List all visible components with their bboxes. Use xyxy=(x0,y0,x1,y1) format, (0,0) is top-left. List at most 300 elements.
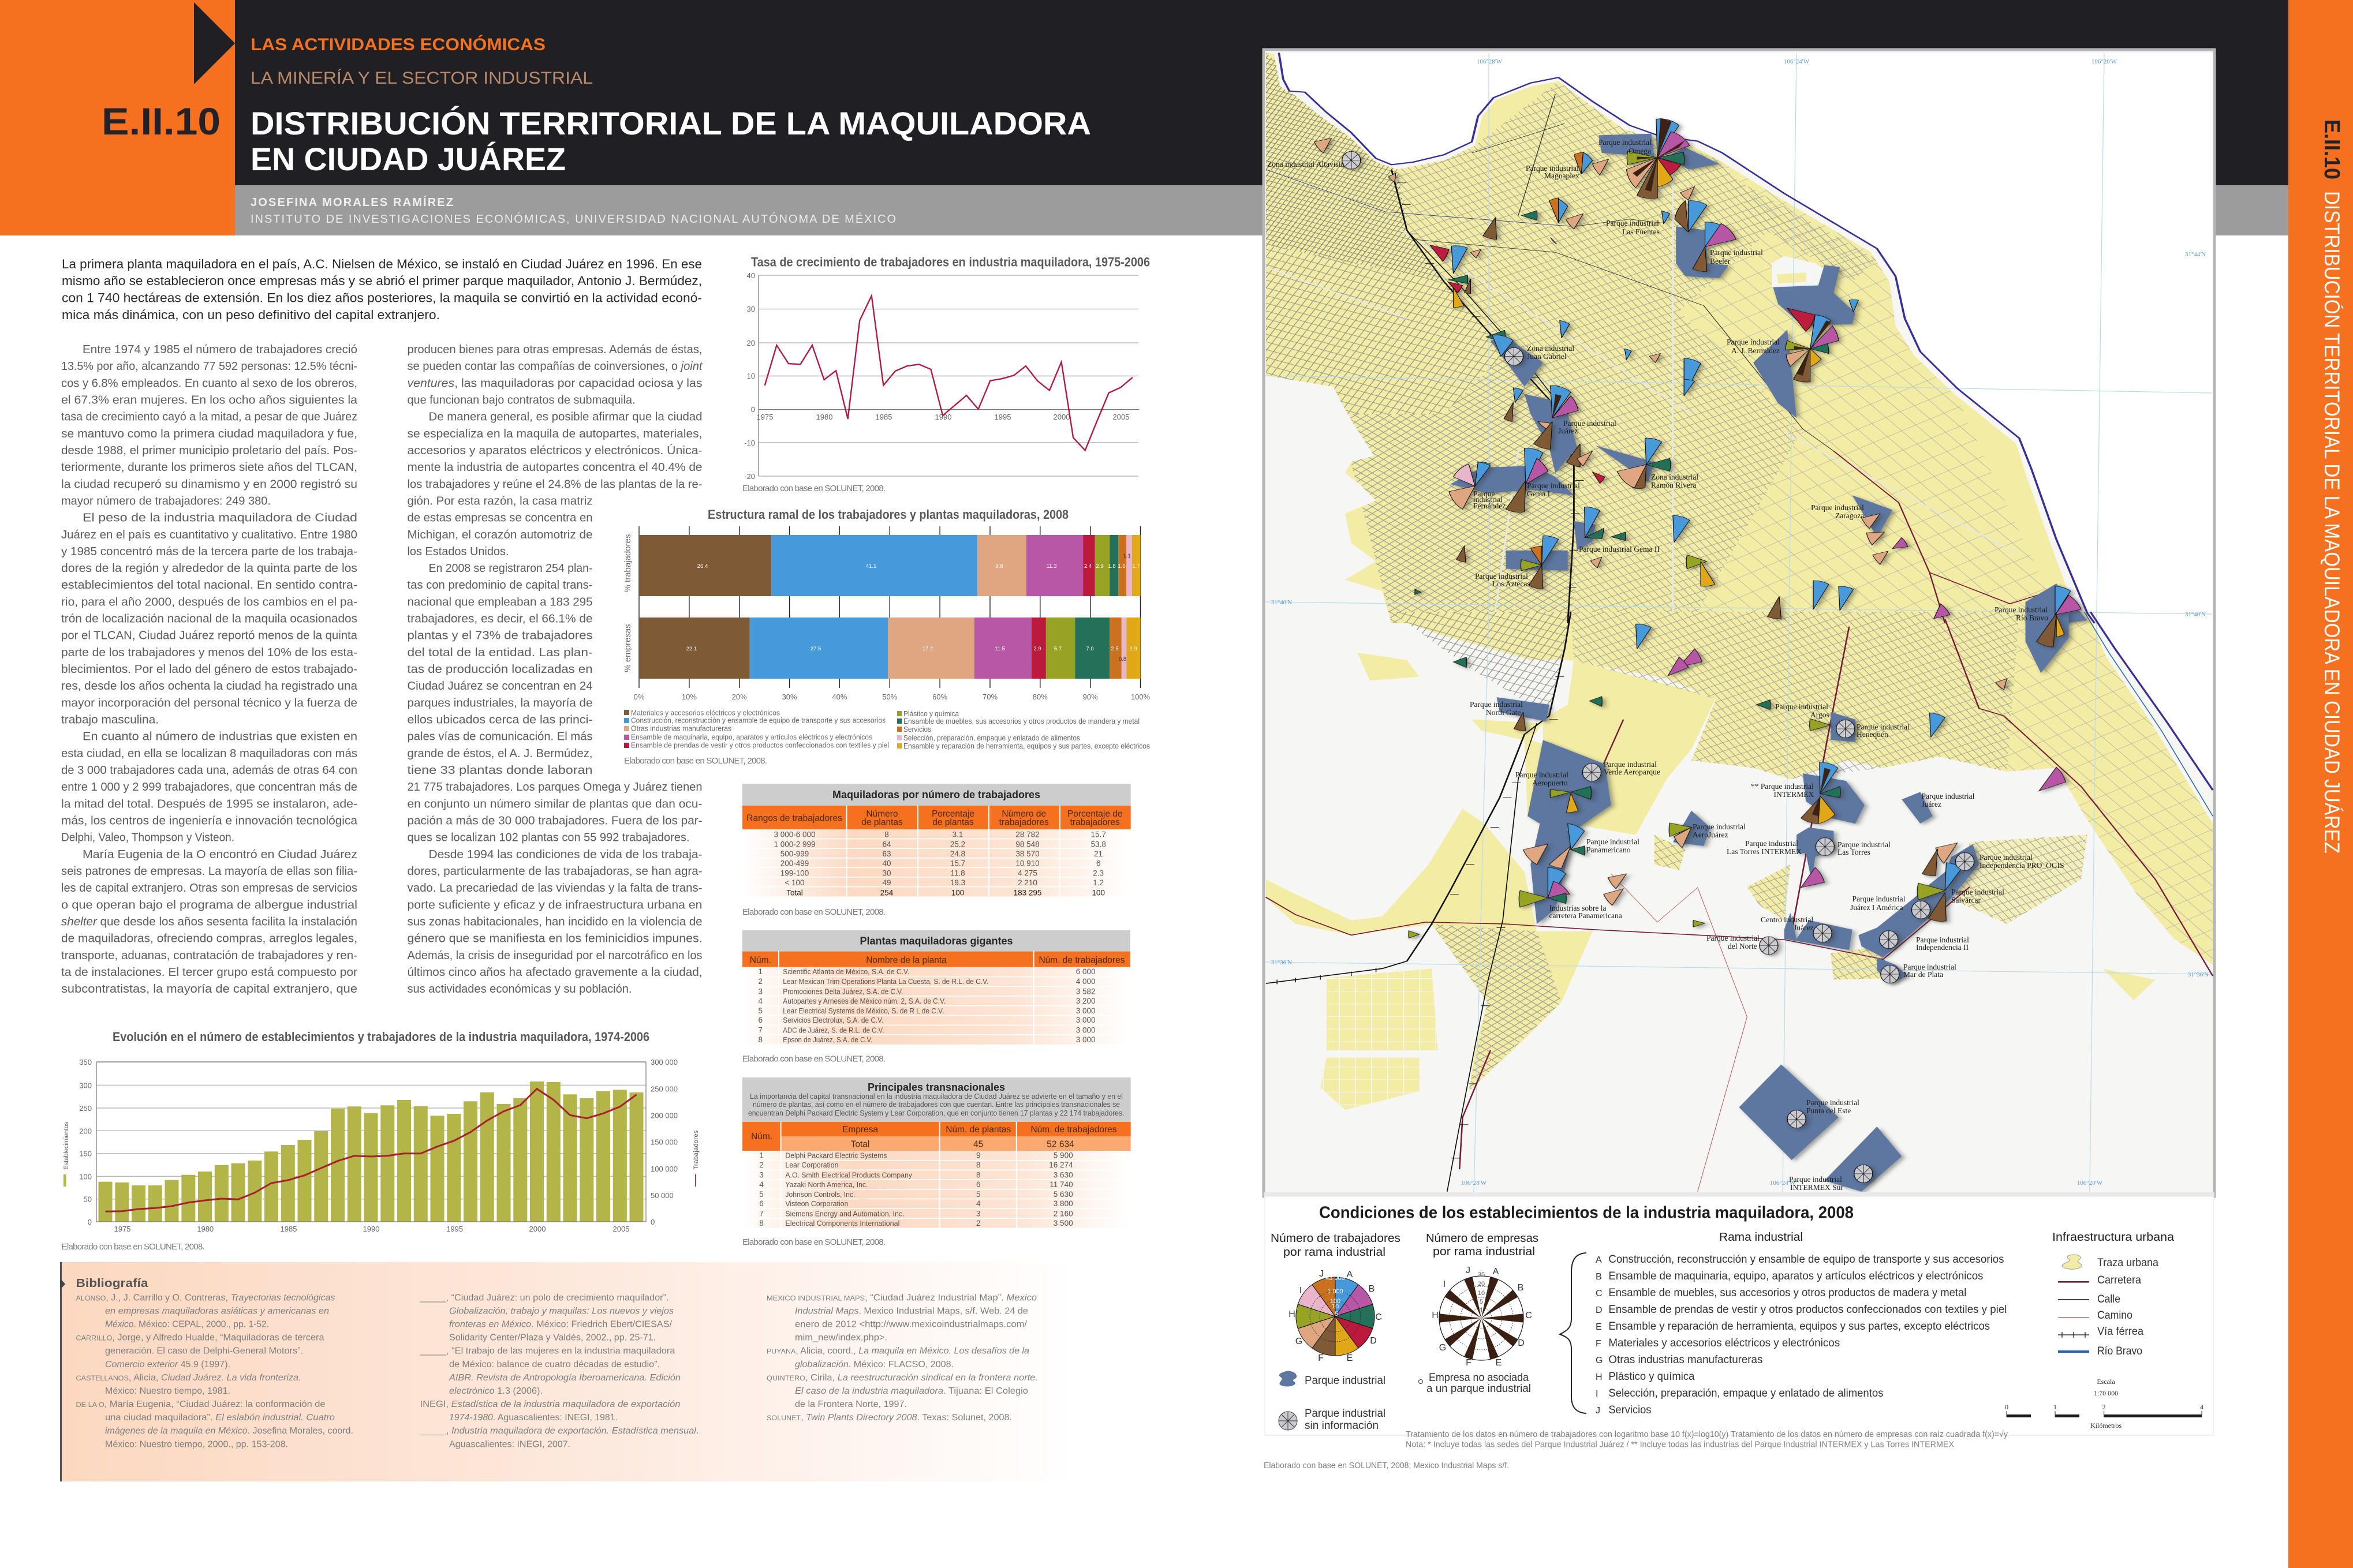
table: maquiladoras por número de trabajadores: 8 xyxy=(884,830,889,839)
legend pie letters 2: C xyxy=(1525,1311,1532,1320)
section label: LAS ACTIVIDADES ECONÓMICAS xyxy=(251,35,546,54)
map code: E.II.10 xyxy=(102,100,221,143)
legend headings: por rama industrial xyxy=(1283,1246,1385,1259)
table: plantas maquiladoras gigantes: Lear Mexican Trim Operations Planta La Cuesta, S. de R.L. de C.V. xyxy=(783,977,988,986)
legend: infraestructura urbana: Traza urbana xyxy=(2097,1257,2158,1269)
table: maquiladoras por número de trabajadores: Número xyxy=(866,809,898,819)
table: principales transnacionales: 8 xyxy=(759,1219,764,1228)
stacked bar chart: estructura ramal: 0% xyxy=(634,693,645,701)
table: principales transnacionales: 2 xyxy=(759,1161,764,1169)
map labels: industrial parks: Parque industrial xyxy=(1470,700,1523,709)
legend: infraestructura urbana: Vía férrea xyxy=(2097,1326,2143,1338)
icon: dark arrow xyxy=(194,2,235,84)
map: industrial parks north xyxy=(1450,134,2087,623)
legend pie letters 2: E xyxy=(1496,1358,1502,1368)
legend pie letters 2: G xyxy=(1439,1343,1446,1353)
table: principales transnacionales: 3 xyxy=(759,1170,764,1179)
table: principales transnacionales: Núm. xyxy=(751,1132,772,1142)
table: plantas maquiladoras gigantes: 3 582 xyxy=(1076,987,1095,996)
map: graticule labels: 31°44'N xyxy=(2185,251,2206,258)
table: principales transnacionales xyxy=(742,1077,1131,1247)
map: graticule labels: 31°36'N xyxy=(1271,959,1292,966)
text block: column 2: se especializa en la maquila de autopartes, materiales, xyxy=(408,428,702,440)
text block: column 2: porte suficiente y eficaz y de infraestructura urbana en xyxy=(408,899,702,911)
legend: rama industrial list: Construcción, reconstrucción y ensamble de equipo de transporte y sus accesorios xyxy=(1608,1253,2004,1266)
chart legend: Ensamble y reparación de herramienta, equipos y sus partes, excepto eléctricos xyxy=(903,742,1150,750)
bar: % trabajadores: 1.8 xyxy=(1108,563,1116,570)
table: principales transnacionales: A.O. Smith Electrical Products Company xyxy=(785,1170,912,1179)
table: principales transnacionales: 45 xyxy=(973,1139,983,1150)
legend: rama industrial list xyxy=(1596,1253,2007,1416)
text block: column 2: género que se manifiesta en los feminicidios impunes. xyxy=(408,933,702,945)
map: graticule labels: 106°24'W xyxy=(1784,58,1810,65)
legend: rama industrial list: I xyxy=(1596,1389,1598,1399)
legend: rama industrial list: E xyxy=(1596,1322,1602,1332)
bar: % trabajadores: 9.8 xyxy=(995,563,1003,570)
map: north half xyxy=(1266,53,2213,623)
table: maquiladoras por número de trabajadores: 30 xyxy=(882,869,891,877)
chart legend: Ensamble de maquinaria, equipo, aparatos y artículos eléctricos y electrónicos xyxy=(631,733,872,741)
text block: column 2: dores, particularmente de las trabajadoras, se han agra- xyxy=(408,865,702,878)
table: maquiladoras por número de trabajadores: < 100 xyxy=(785,878,805,887)
table: maquiladoras por número de trabajadores: 53.8 xyxy=(1091,840,1106,849)
line chart: tasa de crecimiento: -20 xyxy=(744,472,755,481)
map labels: industrial parks: AeroJuárez xyxy=(1693,830,1728,839)
map labels: industrial parks xyxy=(1267,138,2064,1192)
bar: % trabajadores: 1.6 xyxy=(1118,563,1126,570)
table: principales transnacionales: 4 xyxy=(759,1180,764,1189)
header: orange left block xyxy=(0,0,235,235)
map labels: industrial parks: Centro industrial xyxy=(1761,915,1813,924)
line chart: tasa de crecimiento: -10 xyxy=(744,439,755,447)
map labels: industrial parks: ** Parque industrial xyxy=(1751,782,1814,791)
map: graticule labels xyxy=(1271,58,2209,1187)
text block: column 2: ellos ubicados cerca de las princi- xyxy=(408,713,592,726)
map labels: industrial parks: Parque industrial xyxy=(1775,702,1828,711)
legend: rama industrial list: Materiales y accesorios eléctricos y electrónicos xyxy=(1608,1337,1840,1349)
text block: column 2: accesorios y aparatos eléctricos y electrónicos. Única- xyxy=(408,444,702,457)
header: dark title band xyxy=(235,0,2289,185)
references column 3: mim_new/index.php>. xyxy=(795,1333,887,1343)
text block: column 1: shelter que desde los años sesenta facilita la instalación xyxy=(61,915,357,928)
text block: column 2: pación a más de 30 000 trabajadores. Fuera de los par- xyxy=(408,815,702,828)
icon: no-information discs south xyxy=(1582,720,1974,1182)
bar: % empresas: 2.9 xyxy=(1129,646,1137,652)
legend: rama industrial list: F xyxy=(1596,1339,1601,1349)
text block: column 1: blecimientos. Por el lado del género de estos trabajado- xyxy=(61,663,357,676)
text block: column 1: trabajo masculina. xyxy=(61,713,159,726)
table: principales transnacionales: 4 xyxy=(976,1199,981,1208)
table: maquiladoras por número de trabajadores: Porcentaje xyxy=(932,809,974,819)
map labels: industrial parks: Parque industrial xyxy=(1475,572,1528,581)
chart title: Tasa de crecimiento de trabajadores en industria maquiladora, 1975-2006 xyxy=(751,255,1150,270)
map labels: industrial parks: Magnaplex xyxy=(1544,171,1579,180)
table: principales transnacionales: 7 xyxy=(759,1209,764,1218)
table title: Plantas maquiladoras gigantes xyxy=(860,935,1013,946)
bar: % empresas: 0.8 xyxy=(1119,656,1126,663)
legend pie letters 1: F xyxy=(1318,1353,1324,1363)
stacked bar chart: estructura ramal: 20% xyxy=(732,693,747,701)
line chart: tasa de crecimiento: 2000 xyxy=(1054,413,1070,421)
text block: column 1: dores de la región y alrededor de la quinta parte de los xyxy=(61,562,357,575)
intro paragraph: con 1 740 hectáreas de extensión. En los diez años posteriores, la maquila se convirtió en la actividad econó- xyxy=(62,291,702,305)
references column 1: DE LA O, María Eugenia, “Ciudad Juárez: la conformación de xyxy=(76,1399,326,1409)
legend: infraestructura urbana: Río Bravo xyxy=(2097,1345,2142,1357)
map: graticule labels: 31°40'N xyxy=(2185,611,2206,618)
legend: rama industrial list: H xyxy=(1596,1372,1603,1382)
map: graticule labels: 106°20'W xyxy=(2077,1180,2103,1187)
map labels: industrial parks: Zona industrial xyxy=(1527,344,1574,353)
pie glyph: Gema II xyxy=(1585,507,1690,542)
references column 1 xyxy=(76,1293,353,1449)
table: principales transnacionales: Yazaki North America, Inc. xyxy=(785,1180,868,1189)
map labels: industrial parks: Parque industrial Gema II xyxy=(1579,545,1660,553)
legend pie: número de trabajadores: 10 xyxy=(1332,1303,1339,1310)
map labels: industrial parks: Parque industrial xyxy=(1903,963,1956,971)
text block: column 1: de 3 000 trabajadores cada una, además de otras 64 con xyxy=(61,764,357,777)
table: principales transnacionales: Núm. de trabajadores xyxy=(1030,1125,1117,1135)
legend: scale bar: 1:70 000 xyxy=(2094,1389,2118,1397)
author: INSTITUTO DE INVESTIGACIONES ECONÓMICAS, UNIVERSIDAD NACIONAL AUTÓNOMA DE MÉXICO xyxy=(251,212,896,226)
pie glyph: Río Bravo lower xyxy=(2037,613,2064,647)
table: maquiladoras por número de trabajadores: Rangos de trabajadores xyxy=(746,814,842,824)
map labels: industrial parks: Parque industrial xyxy=(1806,1098,1859,1107)
table: principales transnacionales: 16 274 xyxy=(1049,1161,1073,1169)
legend pie letters 1: J xyxy=(1319,1269,1324,1279)
map: pie glyphs south xyxy=(1409,613,2066,1182)
pie glyph: Gema I xyxy=(1506,448,1548,512)
line chart: tasa de crecimiento: 40 xyxy=(747,271,755,280)
source note: Elaborado con base en SOLUNET, 2008. xyxy=(742,907,886,917)
bar: % trabajadores xyxy=(639,535,1141,596)
map frame xyxy=(1264,50,2214,1196)
table: principales transnacionales: 9 xyxy=(976,1151,980,1159)
legend pie letters 1: A xyxy=(1347,1270,1353,1279)
legend pie: número de empresas: 20 xyxy=(1478,1281,1485,1288)
text block: column 1 xyxy=(61,343,358,996)
references column 1: Comercio exterior 45.9 (1997). xyxy=(105,1360,230,1369)
table: maquiladoras por número de trabajadores: 63 xyxy=(882,850,891,858)
table: maquiladoras por número de trabajadores: 21 xyxy=(1094,850,1103,858)
bar: % empresas: 22.1 xyxy=(686,646,697,652)
references column 1: CARRILLO, Jorge, y Alfredo Hualde, “Maquiladoras de tercera xyxy=(76,1333,324,1343)
legend pie: número de empresas: 10 xyxy=(1478,1290,1485,1297)
table: maquiladoras por número de trabajadores: 64 xyxy=(882,840,891,849)
table: principales transnacionales: Lear Corporation xyxy=(785,1161,838,1169)
bar: % empresas: 2.9 xyxy=(1033,646,1041,652)
stacked bar chart: estructura ramal: 100% xyxy=(1131,693,1151,701)
map labels: industrial parks: Parque industrial xyxy=(1727,338,1780,346)
text block: column 1: subcontratistas, la mayoría de capital extranjero, que xyxy=(61,983,357,996)
text block: column 2: los Estados Unidos. xyxy=(408,545,509,558)
legend: parque industrial xyxy=(1279,1371,1385,1387)
map labels: industrial parks: Parque industrial xyxy=(1979,853,2033,862)
map labels: industrial parks: Aeropuerto xyxy=(1532,779,1568,787)
pie glyph: Las Fuentes area xyxy=(1314,138,1669,244)
table: plantas maquiladoras gigantes: Promociones Delta Juárez, S.A. de C.V. xyxy=(783,987,903,996)
text block: column 1: ta de instalaciones. El tercer grupo está compuesto por xyxy=(61,966,357,979)
table: plantas maquiladoras gigantes: 3 000 xyxy=(1076,1006,1095,1015)
text block: column 1: El peso de la industria maquiladora de Ciudad xyxy=(83,512,357,525)
combo chart: establecimientos y trabajadores: 300 000 xyxy=(651,1058,678,1066)
map labels: industrial parks: INTERMEX Sur xyxy=(1790,1183,1843,1192)
chart legend: Servicios xyxy=(903,725,931,734)
table intro text: encuentran Delphi Packard Electric System y Lear Corporation, que en conjunto tienen 17 plantas y 22 174 trabajadores. xyxy=(748,1109,1125,1117)
chart title: Estructura ramal de los trabajadores y plantas maquiladoras, 2008 xyxy=(708,507,1069,522)
table: principales transnacionales: Empresa xyxy=(842,1125,878,1135)
pie glyph: west corridor xyxy=(1430,245,1481,308)
map labels: industrial parks: Punta del Este xyxy=(1806,1106,1851,1115)
stacked bar chart: estructura ramal: 80% xyxy=(1033,693,1048,701)
text block: column 1: Juárez en el país es cuantitativo y cualitativo. Entre 1980 xyxy=(61,529,357,541)
table: maquiladoras por número de trabajadores: 4 275 xyxy=(1018,869,1037,877)
legend: brace xyxy=(1560,1253,1586,1413)
bar: % trabajadores: 1.7 xyxy=(1132,563,1140,570)
legend: infraestructura urbana: Calle xyxy=(2097,1293,2120,1305)
legend pie letters 2: H xyxy=(1432,1311,1439,1320)
stacked bar chart: estructura ramal: 70% xyxy=(983,693,998,701)
map labels: industrial parks: Juan Gabriel xyxy=(1527,352,1567,361)
table: maquiladoras por número de trabajadores: 1 000-2 999 xyxy=(774,840,816,849)
legend: scale bar: 4 xyxy=(2200,1403,2203,1411)
table: plantas maquiladoras gigantes: 4 000 xyxy=(1076,977,1095,986)
table: maquiladoras por número de trabajadores: 200-499 xyxy=(780,859,809,868)
legend pie letters 1: C xyxy=(1375,1312,1382,1322)
combo chart: establecimientos y trabajadores: 0 xyxy=(88,1218,92,1226)
pie glyph: Zaragoza xyxy=(1862,514,1908,564)
map: north roads, railway and river xyxy=(1266,53,2095,623)
references column 2: AIBR. Revista de Antropología Iberoamericana. Edición xyxy=(449,1373,681,1383)
legend: rama industrial list: Otras industrias manufactureras xyxy=(1608,1354,1762,1366)
table: maquiladoras por número de trabajadores: 2 210 xyxy=(1018,878,1037,887)
legend: scale bar: 1 xyxy=(2053,1403,2057,1411)
chart legend: Materiales y accesorios eléctricos y electrónicos xyxy=(631,709,780,717)
bar: % trabajadores: 41.1 xyxy=(866,563,876,570)
pie glyph: Los Aztecas xyxy=(1415,536,1602,594)
pie glyph: INTERMEX xyxy=(1801,762,1840,888)
references column 3: PUYANA, Alicia, coord., La maquila en México. Los desafíos de la xyxy=(767,1346,1029,1356)
text block: column 1: res, desde los años ochenta la ciudad ha registrado una xyxy=(61,680,358,693)
pie glyph: Aero Juárez xyxy=(1669,823,1691,848)
chart legend: Construcción, reconstrucción y ensamble de equipo de transporte y sus accesorios xyxy=(631,717,886,725)
table: maquiladoras por número de trabajadores: 11.8 xyxy=(950,869,965,877)
combo chart: establecimientos y trabajadores: 1995 xyxy=(446,1225,463,1233)
pie glyph: A. J. Bermúdez xyxy=(1786,300,1858,382)
map labels: industrial parks: Parque industrial xyxy=(1951,888,2004,896)
table: maquiladoras por número de trabajadores: de plantas xyxy=(861,817,903,827)
references column 2 xyxy=(419,1293,699,1449)
text block: column 1: de maquiladoras, ofreciendo compras, arreglos legales, xyxy=(61,933,357,945)
text block: column 1: desde 1988, el primer municipio proletario del país. Pos- xyxy=(61,444,357,457)
references column 2: _____, “El trabajo de las mujeres en la industria maquiladora xyxy=(419,1346,675,1356)
legend: scale bar: Kilómetros xyxy=(2090,1421,2122,1429)
text block: column 1: el 67.3% eran mujeres. En los ocho años siguientes la xyxy=(61,394,358,406)
references column 1: México: Nuestro tiempo, 2000., pp. 153-208. xyxy=(105,1439,288,1449)
map labels: industrial parks: Gema I xyxy=(1527,489,1551,498)
intro paragraph: La primera planta maquiladora en el país, A.C. Nielsen de México, se instaló en Ciudad Juárez en 1996. En ese xyxy=(62,257,702,271)
legend pie letters 2: A xyxy=(1493,1267,1499,1277)
references column 2: _____, “Ciudad Juárez: un polo de crecimiento maquilador”. xyxy=(419,1293,668,1303)
references column 3: Industrial Maps . Mexico Industrial Maps, s/f. Web. 24 de xyxy=(795,1306,1028,1316)
text block: column 2: sus zonas habitacionales, han incidido en la violencia de xyxy=(408,915,702,928)
map labels: industrial parks: Parque industrial xyxy=(1710,248,1763,257)
text block: column 1: o que operan bajo el programa de albergue industrial xyxy=(61,899,357,911)
pie glyph: Panamericano xyxy=(1523,824,1585,868)
map labels: industrial parks: Parque industrial xyxy=(1857,723,1910,731)
combo chart: establecimientos y trabajadores: 100 xyxy=(79,1172,92,1181)
text block: column 1: establecimientos del total nacional. En sentido contra- xyxy=(61,579,357,592)
legend: parque industrial sin información xyxy=(1279,1408,1385,1432)
table: maquiladoras por número de trabajadores: 1.2 xyxy=(1093,878,1104,887)
references column 1: en empresas maquiladoras asiáticas y americanas en xyxy=(105,1306,329,1316)
table: principales transnacionales: 52 634 xyxy=(1047,1139,1074,1150)
legend pie: número de empresas: 5 xyxy=(1480,1298,1483,1305)
legend: empresa no asociada xyxy=(1419,1372,1531,1395)
legend pie letters 1: D xyxy=(1370,1336,1377,1346)
bar: % empresas xyxy=(639,618,1141,679)
combo chart: establecimientos y trabajadores: 2000 xyxy=(529,1225,546,1233)
intro paragraph: mica más dinámica, con un peso definitivo del capital extranjero. xyxy=(62,308,440,322)
legend: rama industrial list: C xyxy=(1596,1289,1603,1298)
references column 1: ALONSO, J., J. Carrillo y O. Contreras, Trayectorias tecnológicas xyxy=(76,1293,335,1303)
map labels: industrial parks: Parque industrial xyxy=(1586,837,1639,846)
line chart: tasa de crecimiento: 0 xyxy=(751,405,755,414)
side tab: orange vertical title xyxy=(2288,0,2353,1568)
table intro text: La importancia del capital transnacional en la industria maquiladora de Ciudad Juárez se advierte en el tamaño y en el xyxy=(750,1092,1123,1101)
legend headings: Rama industrial xyxy=(1719,1231,1803,1244)
table: plantas maquiladoras gigantes: 7 xyxy=(759,1026,763,1034)
table: maquiladoras por número de trabajadores: 254 xyxy=(880,888,894,897)
legend: rama industrial list: B xyxy=(1596,1272,1602,1282)
chart legend: Ensamble de prendas de vestir y otros productos confeccionados con textiles y piel xyxy=(631,742,889,750)
map labels: industrial parks: Ramón Rivera xyxy=(1651,481,1696,489)
table: principales transnacionales: 3 xyxy=(976,1209,980,1218)
map labels: industrial parks: Parque industrial xyxy=(1921,792,1975,800)
text block: column 2: pales vías de comunicación. El más xyxy=(408,731,592,743)
legend: infraestructura urbana: Camino xyxy=(2097,1309,2132,1322)
map labels: industrial parks: Parque industrial xyxy=(1811,503,1864,512)
stacked bar chart: estructura ramal: 60% xyxy=(932,693,948,701)
text block: column 2: parques industriales, la mayoría de xyxy=(408,697,592,709)
map labels: industrial parks: Zona industrial Altavista xyxy=(1267,160,1344,169)
combo chart: establecimientos y trabajadores: 50 xyxy=(84,1195,92,1204)
text block: column 1: transporte, aduanas, contratación de trabajadores y ren- xyxy=(61,949,357,962)
map labels: industrial parks: Verde Aeroparque xyxy=(1604,768,1660,776)
map labels: industrial parks: Las Torres xyxy=(1837,848,1870,856)
subsection label: LA MINERÍA Y EL SECTOR INDUSTRIAL xyxy=(251,69,593,88)
bar: % empresas: 7.0 xyxy=(1086,646,1094,652)
legend: notes xyxy=(1406,1429,2008,1450)
legend pie letters 1: G xyxy=(1295,1337,1302,1346)
table: principales transnacionales: Total xyxy=(851,1139,869,1150)
line chart: tasa de crecimiento: 1980 xyxy=(816,413,832,421)
combo chart: establecimientos y trabajadores: 100 000 xyxy=(651,1165,678,1173)
text block: column 2: últimos cinco años ha afectado gravemente a la ciudad, xyxy=(408,966,702,979)
combo chart: establecimientos y trabajadores: 250 xyxy=(79,1104,92,1113)
text block: column 2: producen bienes para otras empresas. Además de éstas, xyxy=(408,343,702,356)
text block: column 2 xyxy=(408,343,703,996)
references column 1: CASTELLANOS , Alicia, Ciudad Juárez. La vida fronteriza . xyxy=(76,1373,301,1383)
text block: column 2: tas de producción localizadas en xyxy=(408,663,592,676)
icon: no-information discs north xyxy=(1342,151,1523,365)
source note: Elaborado con base en SOLUNET, 2008. xyxy=(742,1054,886,1064)
line chart: tasa de crecimiento xyxy=(742,255,1150,493)
map labels: industrial parks: Omega xyxy=(1629,147,1651,155)
legend: rama industrial list: J xyxy=(1596,1406,1600,1416)
chart legend: Ensamble de muebles, sus accesorios y otros productos de mandera y metal xyxy=(903,717,1140,725)
table: principales transnacionales: 5 xyxy=(976,1190,980,1199)
legend: parque industrial sin información: Parque industrial xyxy=(1305,1408,1385,1420)
text block: column 2: sus actividades económicas y su población. xyxy=(408,983,632,996)
bar: % empresas: 27.5 xyxy=(811,646,821,652)
table: plantas maquiladoras gigantes: 3 000 xyxy=(1076,1035,1095,1044)
map labels: industrial parks: Argos xyxy=(1810,710,1829,719)
side tab: orange vertical title: E.II.10 xyxy=(2320,119,2344,179)
stacked bar chart: estructura ramal: 40% xyxy=(832,693,847,701)
pie glyph: Juárez xyxy=(1504,386,1605,484)
table: maquiladoras por número de trabajadores: 25.2 xyxy=(950,840,965,849)
map labels: industrial parks: Parque industrial xyxy=(1852,895,1906,903)
table: maquiladoras por número de trabajadores: 98 548 xyxy=(1015,840,1040,849)
legend pie letters 1 xyxy=(1288,1269,1382,1363)
table: maquiladoras por número de trabajadores: Porcentaje de xyxy=(1067,809,1123,819)
table: maquiladoras por número de trabajadores: 100 xyxy=(1092,888,1105,897)
combo chart: establecimientos y trabajadores: 300 xyxy=(79,1081,92,1090)
table: principales transnacionales: Johnson Controls, Inc. xyxy=(785,1190,855,1199)
references column 3 xyxy=(767,1293,1038,1423)
table: plantas maquiladoras gigantes xyxy=(742,930,1130,1064)
table: maquiladoras por número de trabajadores: 49 xyxy=(882,878,891,887)
table: plantas maquiladoras gigantes: Scientific Atlanta de México, S.A. de C.V. xyxy=(783,967,909,976)
legend pie letters 2: D xyxy=(1518,1338,1525,1348)
table: principales transnacionales: Delphi Packard Electric Systems xyxy=(785,1151,887,1159)
text block: column 2: tiene 33 plantas donde laboran xyxy=(408,764,592,777)
map labels: industrial parks: Parque industrial xyxy=(1837,840,1891,849)
source note: Elaborado con base en SOLUNET, 2008. xyxy=(742,1237,886,1247)
legend: rama industrial list: G xyxy=(1596,1356,1603,1365)
table: plantas maquiladoras gigantes: ADC de Juárez, S. de R.L. de C.V. xyxy=(783,1026,884,1034)
table: maquiladoras por número de trabajadores: de plantas xyxy=(932,817,974,827)
map labels: industrial parks: Parque industrial xyxy=(1604,760,1657,769)
table: plantas maquiladoras gigantes: 3 000 xyxy=(1076,1016,1095,1024)
text block: column 2: vado. La precariedad de las viviendas y la falta de trans- xyxy=(408,882,702,895)
map: graticule xyxy=(1265,53,2212,1192)
text block: column 1: tasa de crecimiento cayó a la mitad, a pesar de que Juárez xyxy=(61,411,357,424)
table: principales transnacionales: Núm. de plantas xyxy=(946,1125,1011,1135)
map labels: industrial parks: Los Aztecas xyxy=(1492,579,1530,588)
bar: % empresas: 17.2 xyxy=(922,646,933,652)
text block: column 1: En cuanto al número de industrias que existen en xyxy=(83,731,357,743)
legend: rama industrial list: D xyxy=(1596,1305,1603,1315)
table: principales transnacionales: 3 500 xyxy=(1054,1219,1073,1228)
text block: column 2: se pueden contar las compañías de coinversiones, o joint xyxy=(408,360,703,373)
table: plantas maquiladoras gigantes: 1 xyxy=(759,967,763,976)
map: industrial parks south xyxy=(1496,612,2069,1192)
legend pie letters 1: H xyxy=(1288,1309,1295,1319)
text block: column 1: mayor incorporación del personal técnico y la fuerza de xyxy=(61,697,357,709)
text block: column 1: por el TLCAN, Ciudad Juárez reportó menos de la quinta xyxy=(61,630,358,642)
legend: rama industrial list: Servicios xyxy=(1608,1404,1651,1416)
table: principales transnacionales: 3 800 xyxy=(1054,1199,1073,1208)
chart legend: Plástico y química xyxy=(903,710,959,718)
author: JOSEFINA MORALES RAMÍREZ xyxy=(251,196,453,209)
legend: rama industrial list: Ensamble de muebles, sus accesorios y otros productos de madera y metal xyxy=(1608,1287,1966,1299)
table: plantas maquiladoras gigantes: Epson de Juárez, S.A. de C.V. xyxy=(783,1035,872,1044)
table: plantas maquiladoras gigantes: 3 000 xyxy=(1076,1026,1095,1034)
map: graticule labels: 31°36'N xyxy=(2188,971,2209,978)
legend title: Condiciones de los establecimientos de la industria maquiladora, 2008 xyxy=(1319,1203,1854,1222)
text block: column 2: Michigan, el corazón automotriz de xyxy=(408,529,592,541)
